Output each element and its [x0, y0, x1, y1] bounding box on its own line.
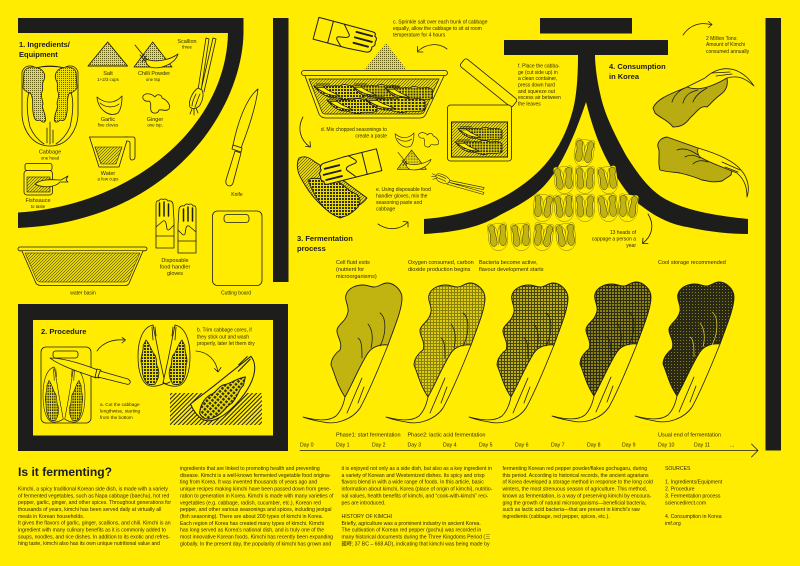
- article column 4: winters, the most strenuous season of agriculture. This method,: [502, 487, 647, 493]
- sources: 2. Procedure: [665, 487, 695, 493]
- label: garlic: five cloves: [98, 122, 119, 128]
- icon: water basin: [18, 247, 147, 286]
- panel: 2. Procedure: [41, 325, 266, 430]
- illustration: lower big leaf: [658, 137, 748, 197]
- frame: vertical bar right: [766, 18, 781, 450]
- heading: fermentation: process: [297, 244, 326, 253]
- step text f: excess air between: [518, 95, 561, 101]
- annotation: annual amount: consumed annually: [706, 49, 750, 55]
- label: water basin: water basin: [70, 290, 96, 296]
- illustration: glove sprinkling salt: [313, 17, 378, 55]
- day labels: Day 9: [622, 442, 636, 448]
- icon: cabbage: [22, 66, 78, 146]
- arrow: to heads label: [642, 214, 652, 244]
- article column 2: has long served as Korea's national dish, and is truly one of the: [180, 528, 324, 534]
- stage notes: Cell fluid exits: [336, 260, 370, 266]
- article column 3: 國時; 37 BC – 668 AD), indicating that kimchi was being made by: [342, 540, 490, 547]
- arrow: to drying: [196, 351, 221, 372]
- day labels: Day 1: [336, 442, 350, 448]
- label: garlic: Garlic: [101, 117, 115, 123]
- icon: disposable gloves: [156, 199, 196, 253]
- heading: fermentation: 3. Fermentation: [297, 234, 353, 243]
- article column 1: Kimchi, a spicy traditional Korean side dish, is made with a variety: [18, 486, 168, 492]
- label: cabbage: one head: [41, 156, 60, 160]
- article column 3: HISTORY OF KIMCHI: [342, 514, 392, 520]
- label: salt: Salt: [103, 71, 113, 77]
- panel: salting and seasoning steps: [297, 17, 561, 229]
- label: knife: Knife: [231, 192, 243, 198]
- arrow: timeline: [300, 444, 758, 457]
- day labels: Day 0: [300, 442, 314, 448]
- chart: leaf stage 5: [635, 282, 734, 422]
- illustration: sealed container: [448, 105, 512, 161]
- day labels: Day 10: [658, 442, 675, 448]
- illustration: cabbage drying on hatch: [170, 346, 266, 430]
- article column 4: ingredients (cabbage, red pepper, spices, etc.).: [502, 514, 610, 520]
- sources: SOURCES: [665, 466, 691, 472]
- chart: leaf stage 2: [386, 283, 485, 423]
- article column 1: It gives the flavors of garlic, ginger, scallions, and chili. Kimchi is an: [18, 521, 171, 527]
- article column 3: nal values, health benefits of kimchi, and “cook-with-kimchi” reci-: [342, 493, 489, 499]
- label: gloves: gloves: [167, 271, 183, 277]
- step text e: cabbage: [376, 206, 395, 212]
- article column 2: vegetables (e.g. cabbage, radish, cucumber, etc.), Korean red: [180, 500, 321, 506]
- stage notes: dioxide production begins: [408, 267, 471, 273]
- article column 2: disease. Kimchi is a well-known fermented vegetable food origina-: [180, 473, 331, 479]
- day labels: ...: [730, 442, 734, 448]
- illustration: falling salt: [364, 43, 407, 70]
- article column 1: of fermented vegetables, such as Napa cabbage (baechu), hot red: [18, 493, 169, 499]
- article column 2: ting from Korea. It was invented thousands of years ago and: [180, 480, 317, 486]
- icon: ginger: [143, 94, 170, 113]
- icon: garlic: [97, 96, 122, 115]
- heading: ingredients: Equipment: [19, 50, 58, 59]
- label: salt: 1+2/3 cups: [97, 77, 120, 82]
- article column 4: of Korea developed a storage method in response to the long cold: [502, 480, 653, 486]
- annotation: annual amount: 2 Million Tons:: [706, 36, 738, 42]
- label: scallion: Scallion: [177, 39, 197, 45]
- step text e: seasoning paste and: [376, 200, 422, 206]
- label: water: a few cups: [98, 176, 119, 182]
- article column 2: Each region of Korea has created many types of kimchi. Kimchi: [180, 521, 324, 527]
- label: cutting board: Cutting board: [221, 290, 251, 296]
- frame: procedure box: [18, 304, 288, 451]
- article column 3: many historical documents during the Three Kingdoms Period (三: [342, 534, 490, 540]
- day labels: Day 6: [515, 442, 529, 448]
- annotation: 13 heads: cappage a person a: [592, 236, 636, 242]
- label: water: Water: [101, 171, 115, 177]
- chart: leaf stage 1: [303, 283, 402, 423]
- step text c: temperature for 4 hours: [393, 32, 446, 38]
- article column 1: soups, noodles, and rice dishes. In addition to its exotic and refres-: [18, 534, 170, 540]
- step text b: they stick out and wash: [197, 334, 249, 340]
- label: ginger: one tsp.: [147, 122, 163, 128]
- icon: knife: [226, 89, 258, 186]
- icon: fish sauce jar: [24, 164, 68, 195]
- stage notes: Cool storage recommended: [658, 260, 726, 266]
- article column 4: ging the growth of natural microorganisms—beneficial bacteria,: [502, 500, 646, 506]
- arrow: to halves: [97, 338, 126, 351]
- label: fish sauce: to taste: [31, 204, 46, 209]
- step text f: a clean container,: [518, 76, 557, 82]
- article column 2: (fish seasoning). There are about 200 types of kimchi in Korea.: [180, 514, 323, 520]
- article column 1: ingredient with many culinary benefits as it is commonly added to: [18, 528, 166, 534]
- article column 3: it is enjoyed not only as a side dish, but also as a key ingredient in: [342, 466, 492, 472]
- article column 2: pepper, and other various seasonings and spices, including jeotgal: [180, 507, 331, 513]
- icon: scallion: [189, 38, 216, 115]
- step text f: and squeeze out: [518, 89, 556, 95]
- article column 3: a variety of Korean and Westernized dishes. Its spicy and crisp: [342, 473, 485, 479]
- article column 3: pes are introduced.: [342, 500, 386, 506]
- annotation: 13 heads: 13 heads of: [610, 230, 637, 236]
- day labels: [300, 442, 734, 448]
- illustration: lid: [459, 58, 518, 108]
- article column 1: meals in Korean households.: [18, 514, 84, 520]
- article column 2: ingredients that are linked to promoting health and preventing: [180, 466, 320, 472]
- step text f: press down hard: [518, 82, 555, 88]
- article column 1: hing taste, kimchi also has its own unique nutritional value and: [18, 541, 160, 547]
- icon: chilli powder: [134, 42, 178, 68]
- arrow: c: [418, 45, 447, 52]
- article column 1: thousands of years, kimchi has been served daily at virtually all: [18, 507, 161, 513]
- step text e: e. Using disposable food: [376, 187, 431, 193]
- article column 4: such as lactic acid bacteria—that are present in kimchi's raw: [502, 507, 640, 513]
- step text c: c. Sprinkle salt over each trunk of cabbage: [393, 20, 488, 26]
- step text c: equally, allow the cabbage to sit at room: [393, 26, 482, 32]
- article column 4: known as fermentation, is a way of preserving kimchi by encoura-: [502, 493, 652, 499]
- label: gloves: Disposable: [161, 258, 189, 264]
- article column 2: most innovative Korean foods. Kimchi has recently been expanding: [180, 534, 333, 540]
- step text f: f. Place the cabba-: [518, 64, 560, 70]
- arrow: to annual amount: [683, 22, 712, 35]
- sources: sciencedirect.com: [665, 500, 706, 506]
- article column 3: The cultivation of Korean red pepper (gochu) was recorded in: [342, 528, 481, 534]
- label: chilli powder: one tsp: [146, 77, 161, 82]
- arrow: e: [378, 222, 408, 229]
- panel: 4. Consumption in Korea: [487, 22, 754, 252]
- step text d: d. Mix chopped seasonings to: [321, 127, 387, 133]
- label: gloves: food handler: [160, 264, 190, 270]
- frame: vertical bar left: [273, 18, 288, 282]
- heading: ingredients: 1. Ingredients/: [19, 40, 71, 49]
- article column 1: pepper, garlic, ginger, and other spices. Throughout generations for: [18, 500, 171, 506]
- day labels: Day 5: [479, 442, 493, 448]
- annotation: 13 heads: year: [626, 243, 636, 249]
- step text d: create a paste: [355, 134, 387, 140]
- label: ginger: Ginger: [147, 117, 163, 123]
- sources: imf.org: [665, 521, 681, 527]
- day labels: Day 4: [443, 442, 457, 448]
- illustration: cabbage halves: [138, 325, 190, 386]
- article column 2: ration to generation in Korea. Kimchi is made with many varieties of: [180, 493, 334, 499]
- article: [18, 465, 724, 547]
- icon: water cup: [90, 137, 135, 167]
- stage notes: Oxygen consumed, carbon: [408, 260, 474, 266]
- heading: consumption: in Korea: [609, 72, 640, 81]
- label: scallion: three: [182, 44, 193, 50]
- phase labels: Phase2: lactic acid fermentation: [408, 432, 485, 438]
- sources: 4. Consumption in Korea: [665, 514, 722, 520]
- annotation: annual amount: Amount of Kimchi: [706, 42, 745, 48]
- illustration: upper big leaf: [653, 69, 754, 127]
- stage notes: flavour development starts: [479, 267, 544, 273]
- step text a: lengthwise, starting: [100, 408, 141, 414]
- illustration: salting container: [302, 70, 448, 118]
- article column 3: Briefly, agriculture was a prominent industry in ancient Korea.: [342, 521, 481, 527]
- step text b: properly, later let them dry: [197, 341, 255, 347]
- article column 4: fermenting Korean red pepper powder/flakes gochugaru, during: [502, 466, 647, 472]
- title: Is it fermenting?: [18, 465, 112, 479]
- sources: 1. Ingredients/Equipment: [665, 480, 723, 486]
- stage notes: [336, 260, 726, 280]
- phase labels: [336, 432, 721, 438]
- day labels: Day 11: [694, 442, 710, 448]
- step text f: the leaves: [518, 102, 541, 108]
- step text b: b. Trim cabbage cores, if: [197, 328, 252, 334]
- pictogram: 13 cabbage heads: [487, 138, 639, 252]
- frame: section 1 quarter-arc bar: [18, 18, 244, 228]
- phase labels: Usual end of fermentation: [658, 432, 721, 438]
- day labels: Day 8: [587, 442, 601, 448]
- icons: seasonings: [395, 133, 485, 194]
- day labels: Day 3: [408, 442, 421, 448]
- phase labels: Phase1: start fermentation: [336, 432, 401, 438]
- day labels: Day 2: [372, 442, 386, 448]
- day labels: Day 7: [551, 442, 565, 448]
- label: fish sauce: Fishsauce: [25, 198, 51, 204]
- article column 2: unique recipes making kimchi have been passed down from gene-: [180, 487, 331, 493]
- heading: consumption: 4. Consumption: [609, 62, 666, 71]
- stage notes: Bacteria become active,: [479, 260, 538, 266]
- step text a: from the bottom: [100, 415, 133, 420]
- heading: procedure: 2. Procedure: [41, 327, 86, 336]
- illustration: cutting cabbage on board: [41, 347, 130, 423]
- label: chilli powder: Chilli Powder: [138, 71, 170, 77]
- chart: leaf stage 3: [469, 283, 568, 423]
- article column 4: this period. According to historical records, the ancient agrarians: [502, 473, 649, 479]
- sources: 3. Fermentation process: [665, 493, 721, 499]
- stage notes: (nutrient for: [336, 267, 364, 273]
- chart: leaf stage 4: [552, 282, 651, 422]
- icon: salt pile: [88, 42, 128, 66]
- panel: 1. Ingredients / Equipment: [18, 38, 262, 296]
- illustration: glove mixing cabbage: [297, 149, 382, 218]
- arrow: down to paste: [300, 117, 310, 147]
- panel: 3. Fermentation process: [297, 234, 758, 457]
- article column 3: information about kimchi, Korea (place of origin of kimchi), nutritio-: [342, 487, 493, 493]
- article column 2: globally. In the present day, the popularity of kimchi has grown and: [180, 541, 331, 547]
- label: cabbage: Cabbage: [39, 150, 61, 156]
- stage notes: microorganisms): [336, 274, 377, 280]
- step text e: handler gloves, mix the: [376, 194, 428, 200]
- article column 3: flavors blend in with a wide range of foods. In this article, basic: [342, 480, 484, 486]
- step text f: ge (cut side up) in: [518, 70, 558, 76]
- step text a: a. Cut the cabbage: [100, 402, 140, 407]
- icon: cutting board: [212, 211, 262, 286]
- frame: large character-shaped bars: [424, 18, 748, 234]
